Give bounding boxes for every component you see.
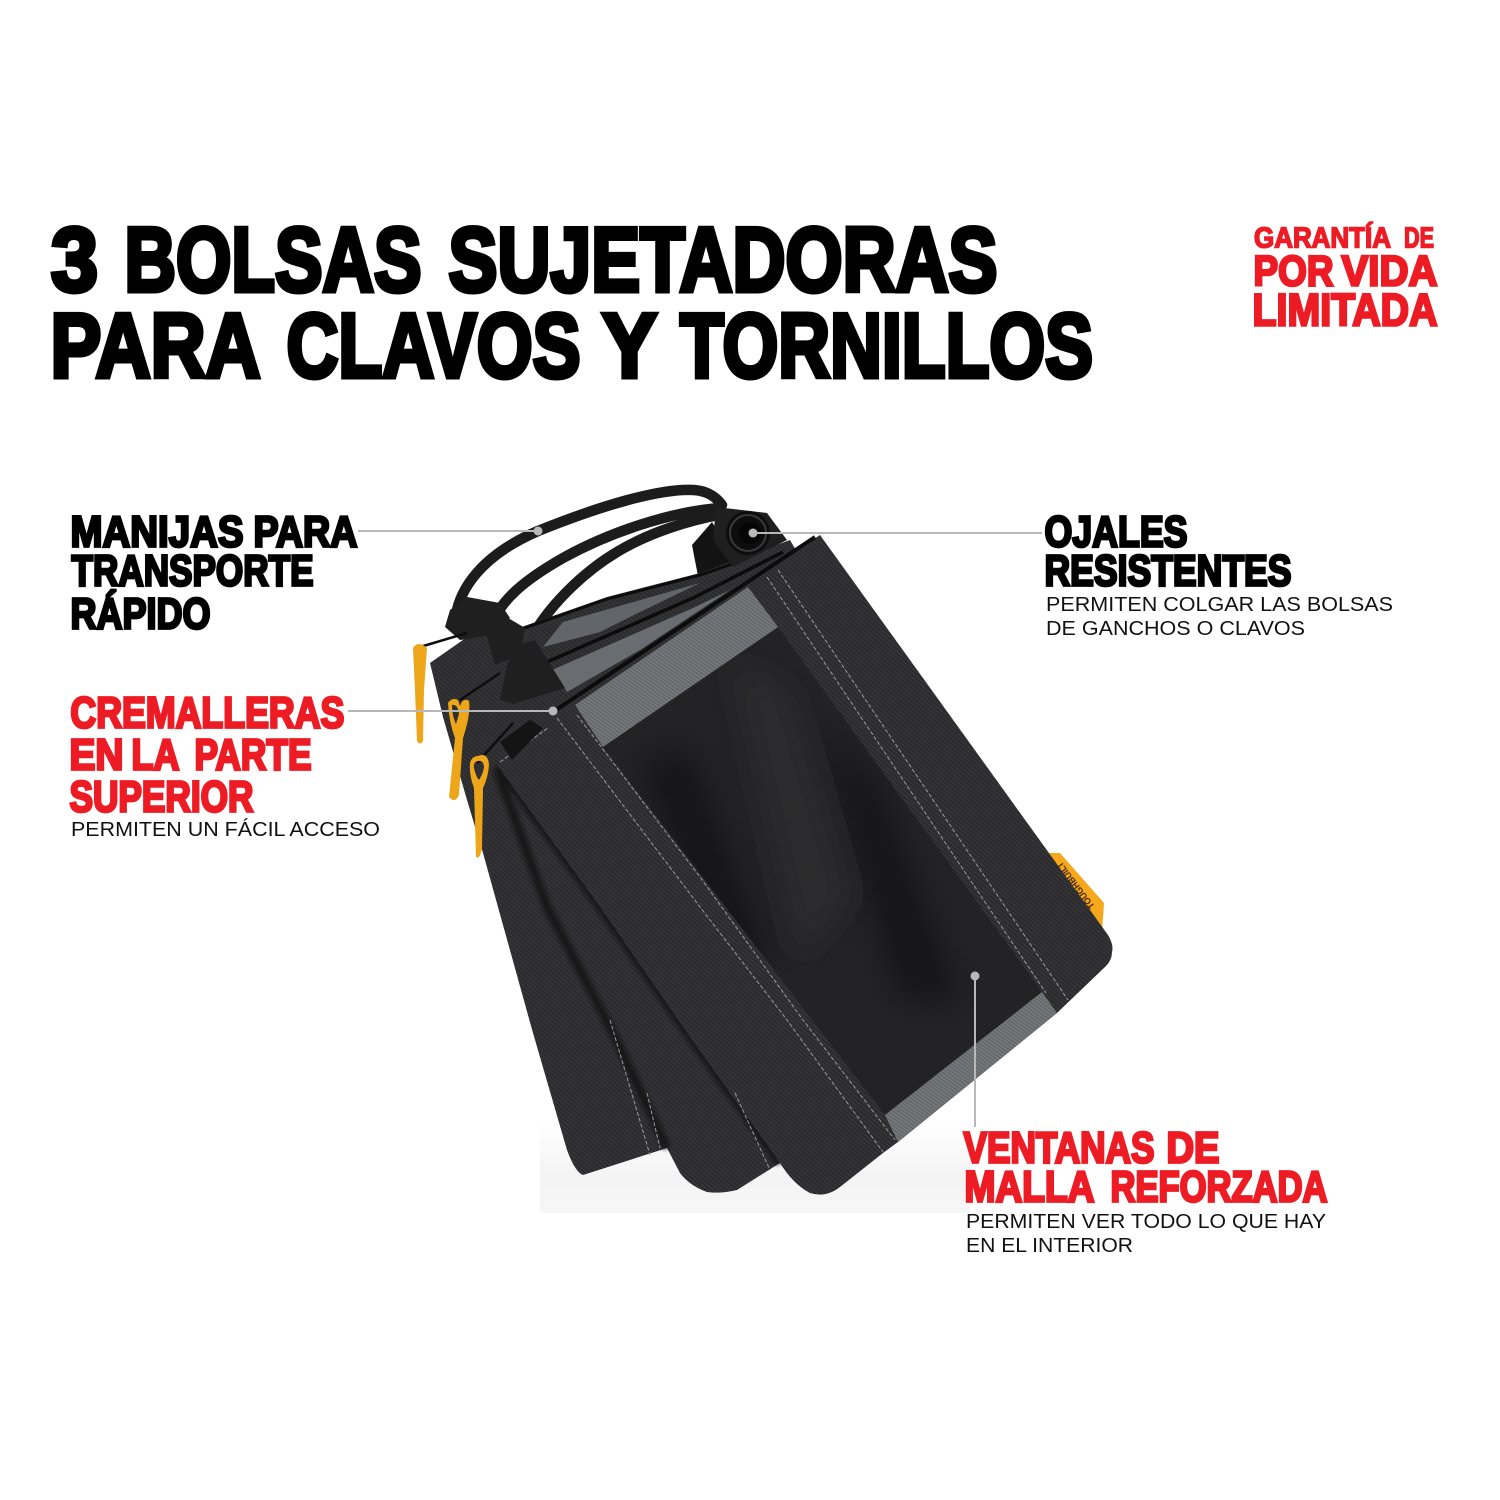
back bag xyxy=(430,540,1000,1175)
warranty badge: POR xyxy=(1254,248,1334,296)
warranty badge xyxy=(1252,220,1438,336)
zippers heading: SUPERIOR xyxy=(70,773,254,822)
leader: handles xyxy=(358,526,542,536)
brand tag: TOUGHBUILT xyxy=(1055,860,1097,911)
front bag xyxy=(497,535,1112,1195)
handle webbing anchors xyxy=(445,507,787,704)
zippers heading: PARTE xyxy=(194,731,312,780)
callout: handles: TRANSPORTE xyxy=(72,547,314,596)
back bag grey lining xyxy=(543,583,700,647)
title: SUJETADORAS xyxy=(448,210,998,311)
title: Y xyxy=(602,296,657,397)
zippers heading: CREMALLERAS xyxy=(70,689,344,738)
zippers heading xyxy=(70,689,344,822)
title: TORNILLOS xyxy=(680,296,1093,397)
warranty badge: DE xyxy=(1404,222,1434,254)
mesh contents shadow xyxy=(648,698,950,1000)
title: 3 xyxy=(51,210,98,311)
warranty badge: LIMITADA xyxy=(1252,285,1438,336)
title xyxy=(50,210,1093,397)
product photo: three fastener bags xyxy=(413,490,1112,1195)
middle zipper xyxy=(547,552,783,662)
floor shadow xyxy=(540,1120,970,1213)
mesh heading: REFORZADA xyxy=(1110,1163,1328,1212)
leader: grommets xyxy=(748,528,1042,538)
mesh heading: DE xyxy=(1166,1124,1220,1173)
grommets description xyxy=(1046,593,1393,640)
top zipper xyxy=(553,537,815,712)
mesh window xyxy=(603,627,1042,1115)
mesh description: PERMITEN VER TODO LO QUE HAY xyxy=(966,1210,1326,1233)
grommets heading: RESISTENTES xyxy=(1044,547,1292,596)
zippers description: PERMITEN UN FÁCIL ACCESO xyxy=(71,818,380,841)
mesh description xyxy=(966,1210,1326,1257)
callout: handles: MANIJAS xyxy=(70,508,244,557)
mesh heading: MALLA xyxy=(964,1163,1094,1212)
grommets description: DE GANCHOS O CLAVOS xyxy=(1046,617,1305,640)
callout: grommets xyxy=(1044,508,1393,640)
warranty badge: GARANTÍA xyxy=(1254,220,1391,254)
grommets description: PERMITEN COLGAR LAS BOLSAS xyxy=(1046,593,1393,616)
back zipper xyxy=(513,563,735,632)
callout: handles xyxy=(70,508,358,639)
grey bottom strip xyxy=(885,992,1057,1142)
title: BOLSAS xyxy=(124,210,422,311)
zippers heading: LA xyxy=(132,731,180,780)
leader: mesh windows xyxy=(970,972,980,1127)
middle bag grey lining xyxy=(552,590,730,692)
callout: mesh windows xyxy=(964,1124,1328,1257)
callout: handles: RÁPIDO xyxy=(70,589,210,639)
mesh heading xyxy=(964,1124,1328,1212)
title: PARA xyxy=(50,296,260,397)
leader: zippers xyxy=(348,706,558,716)
rear grommet xyxy=(692,522,735,576)
front zipper slider xyxy=(500,720,543,760)
mesh heading: VENTANAS xyxy=(964,1124,1154,1173)
grey top strip xyxy=(575,587,778,747)
callout: handles: PARA xyxy=(254,508,358,557)
warranty badge: VIDA xyxy=(1342,248,1438,296)
grommets heading: OJALES xyxy=(1044,508,1188,557)
grommet xyxy=(726,511,770,555)
fold shadows xyxy=(497,766,780,1163)
grommets heading xyxy=(1044,508,1292,596)
zippers heading: EN xyxy=(70,731,124,780)
leader lines xyxy=(348,526,1042,1127)
handles xyxy=(456,490,724,640)
brand tag xyxy=(1040,853,1104,932)
stitching xyxy=(500,570,1068,1170)
title: CLAVOS xyxy=(286,296,580,397)
callout: zippers xyxy=(70,689,380,841)
middle bag xyxy=(467,545,1000,1193)
zipper sliders xyxy=(420,633,513,763)
yellow zipper pulls xyxy=(413,644,489,858)
mesh description: EN EL INTERIOR xyxy=(966,1234,1133,1257)
